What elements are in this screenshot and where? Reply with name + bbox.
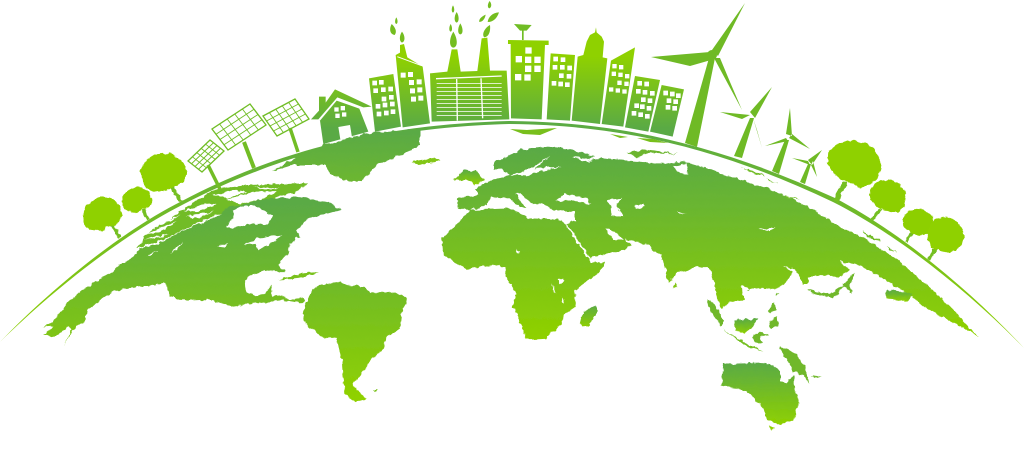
Caribbean islands (278, 272, 378, 392)
large wind turbine (651, 3, 745, 147)
city skyline (311, 1, 684, 144)
inland seas and lakes (510, 156, 688, 304)
Madagascar (580, 305, 597, 327)
Tasmania (768, 425, 775, 431)
Lake Baikal (758, 227, 775, 231)
factory (430, 38, 509, 122)
Novaya Zemlya (627, 149, 678, 158)
apartment building A (369, 74, 401, 132)
Japan (806, 272, 855, 298)
Australia (721, 363, 799, 425)
wind turbines (651, 3, 822, 184)
slanted building (602, 47, 635, 127)
left trees (83, 153, 187, 239)
tree 6 (903, 209, 933, 243)
polar islands near horizon (510, 128, 668, 143)
house (311, 89, 372, 144)
solar panel large (212, 104, 266, 168)
tree 5 (869, 180, 906, 222)
Americas and Arctic (43, 129, 420, 403)
New Guinea (780, 347, 822, 383)
building (547, 53, 575, 121)
Borneo (733, 318, 758, 334)
Philippines (747, 288, 780, 328)
tree 2 (122, 187, 151, 221)
Greenland and horizon land (272, 129, 420, 182)
Eurasia (457, 147, 978, 337)
wind turbine 3 (765, 108, 810, 174)
solar panel small (188, 140, 224, 189)
tree 7 (927, 217, 964, 261)
Sulawesi (752, 332, 768, 343)
Hudson Bay and Great Lakes (147, 206, 320, 256)
Old World (412, 147, 978, 431)
tree 1 (83, 197, 122, 239)
North America (43, 197, 342, 345)
Africa (442, 208, 606, 339)
building (625, 76, 660, 132)
Kamchatka fragment (886, 289, 913, 302)
tree 3 (141, 153, 187, 203)
South America (302, 283, 407, 403)
tall building with rooftop solar (508, 24, 549, 119)
solar panel medium (263, 99, 309, 152)
solar panels (188, 99, 309, 189)
Iceland (412, 158, 442, 165)
British Isles (453, 169, 485, 185)
wind turbine 2 (720, 87, 772, 158)
Sumatra (707, 299, 725, 327)
smoke leaves (390, 1, 499, 48)
building with chimney (396, 44, 430, 127)
wind turbine 4 (792, 150, 822, 184)
Asian islands (707, 167, 913, 431)
Arctic islands (137, 183, 308, 248)
Siberian islands (742, 167, 897, 253)
tree 4 (827, 141, 881, 203)
right trees (827, 141, 964, 261)
world map (43, 128, 978, 431)
building (650, 85, 684, 137)
globe horizon arc (0, 121, 1024, 348)
domed building (572, 27, 607, 124)
Java (722, 328, 763, 352)
Sri Lanka (673, 282, 677, 288)
